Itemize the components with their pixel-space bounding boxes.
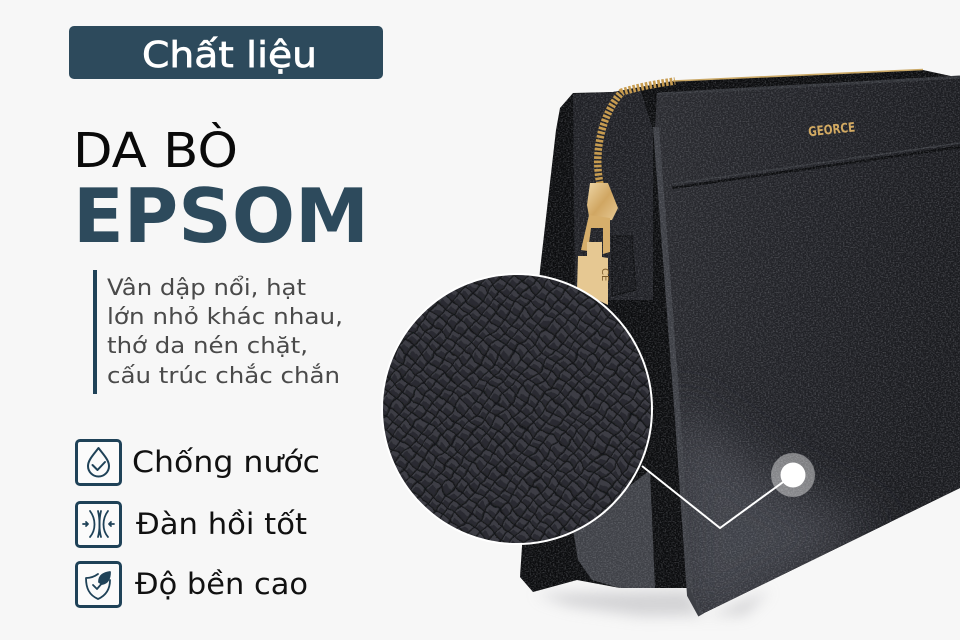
lower gusset leather bbox=[573, 470, 655, 588]
gold top edge bbox=[673, 70, 923, 81]
icon: shield with leaf bbox=[76, 562, 120, 606]
heading badge: Chất liệu bbox=[142, 35, 317, 76]
zipper pull ring bbox=[581, 215, 610, 254]
label: Độ bền cao bbox=[135, 567, 308, 601]
icon: water drop bbox=[76, 440, 120, 484]
bag shadow bbox=[535, 590, 770, 618]
magnified leather texture circle bbox=[383, 274, 653, 545]
feature: durability bbox=[76, 562, 308, 606]
callout connector bbox=[642, 466, 790, 528]
description block: Vân dập nổi, hạt bbox=[107, 276, 306, 301]
title line 2: EPSOM bbox=[73, 172, 369, 260]
lighter lower-left leather bbox=[681, 412, 870, 613]
top edge of bag bbox=[658, 77, 960, 94]
product photo: black leather bag bbox=[520, 70, 960, 640]
top flap highlight bbox=[672, 143, 960, 184]
front panel bbox=[655, 77, 960, 615]
zipper slider bbox=[587, 183, 618, 222]
top flap seam bbox=[672, 147, 960, 188]
warped weave bbox=[383, 275, 651, 543]
brand logo: GEORCE bbox=[808, 120, 856, 140]
title line 1: DA BÒ bbox=[73, 122, 238, 179]
soft highlight bbox=[681, 412, 870, 613]
leather grain overlay bbox=[520, 70, 960, 620]
label: Chống nước bbox=[132, 445, 320, 479]
description block bbox=[93, 270, 343, 394]
zipper pocket bbox=[612, 236, 636, 296]
description block: thớ da nén chặt, bbox=[107, 334, 308, 359]
description block: cấu trúc chắc chắn bbox=[107, 364, 340, 389]
feature: good elasticity bbox=[76, 502, 307, 546]
bag side gusset bbox=[573, 88, 653, 300]
zipper pull engraving: CE bbox=[599, 268, 610, 281]
callout hotspot bbox=[771, 453, 815, 497]
feature: water resistant bbox=[76, 440, 320, 484]
zipper bbox=[598, 81, 675, 184]
icon: elastic arrows bbox=[76, 502, 120, 546]
bag body bbox=[520, 70, 960, 615]
heading badge bbox=[69, 26, 383, 79]
zipper pull tab bbox=[577, 242, 608, 305]
description block: lớn nhỏ khác nhau, bbox=[107, 305, 343, 330]
label: Đàn hồi tốt bbox=[136, 507, 307, 541]
front panel edge bbox=[656, 127, 701, 615]
